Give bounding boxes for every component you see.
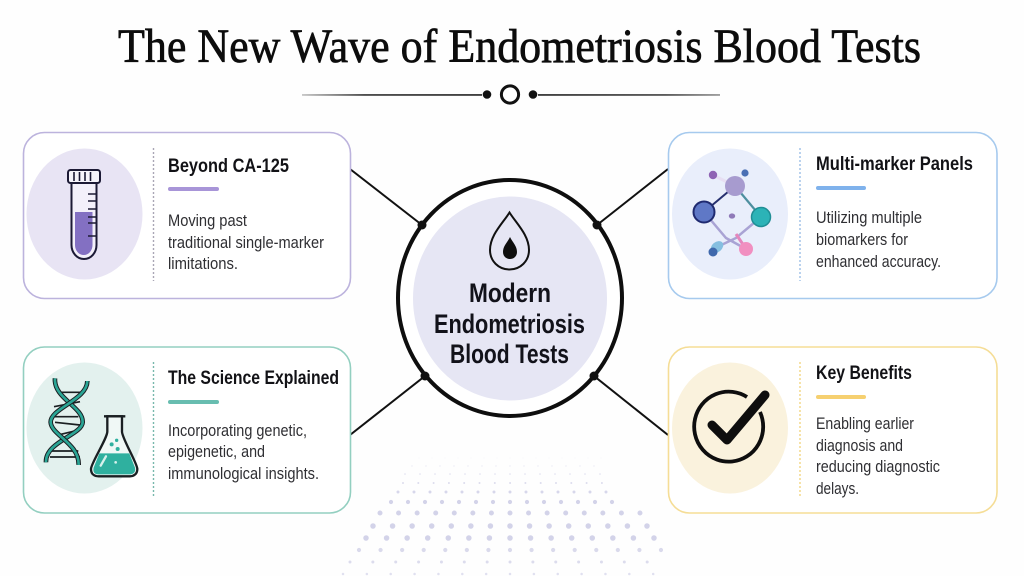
- text block: limitations.: [168, 255, 238, 273]
- title: The New Wave of Endometriosis Blood Tests: [118, 20, 921, 73]
- text block: enhanced accuracy.: [816, 253, 941, 271]
- icon: molecule network: [694, 169, 770, 256]
- text block: [816, 209, 941, 271]
- text block: Enabling earlier: [816, 415, 914, 433]
- text block: immunological insights.: [168, 465, 319, 483]
- text block: delays.: [816, 480, 859, 498]
- text block: traditional single-marker: [168, 234, 324, 252]
- panel: Key Benefits: [668, 347, 997, 513]
- hub label: [434, 278, 585, 369]
- icon: test tube: [68, 170, 100, 259]
- hub label: Blood Tests: [450, 339, 569, 369]
- icon: check mark in circle: [694, 392, 765, 462]
- text block: Moving past: [168, 212, 247, 230]
- panel: Beyond CA-125: [24, 132, 350, 298]
- text block: [168, 422, 319, 483]
- text block: diagnosis and: [816, 437, 903, 455]
- text block: [816, 415, 940, 498]
- central hub: [398, 180, 622, 416]
- heading: Key Benefits: [816, 362, 912, 384]
- text block: epigenetic, and: [168, 443, 265, 461]
- heading: Beyond CA-125: [168, 155, 289, 177]
- text block: [168, 212, 324, 273]
- icon: flask: [91, 416, 137, 476]
- text block: biomarkers for: [816, 231, 908, 249]
- background dot pattern: [343, 458, 677, 574]
- hub label: Endometriosis: [434, 309, 585, 339]
- text block: reducing diagnostic: [816, 458, 940, 476]
- heading: The Science Explained: [168, 367, 339, 389]
- heading: Multi-marker Panels: [816, 153, 973, 175]
- panel: Multi-marker Panels: [668, 132, 997, 298]
- text block: Incorporating genetic,: [168, 422, 307, 440]
- connector lines: [350, 169, 668, 435]
- icon: blood drop: [490, 212, 529, 270]
- icon: DNA helix: [46, 378, 87, 465]
- title ornament: [302, 86, 720, 103]
- text block: Utilizing multiple: [816, 209, 922, 227]
- panel: The Science Explained: [24, 347, 350, 513]
- hub label: Modern: [469, 278, 551, 308]
